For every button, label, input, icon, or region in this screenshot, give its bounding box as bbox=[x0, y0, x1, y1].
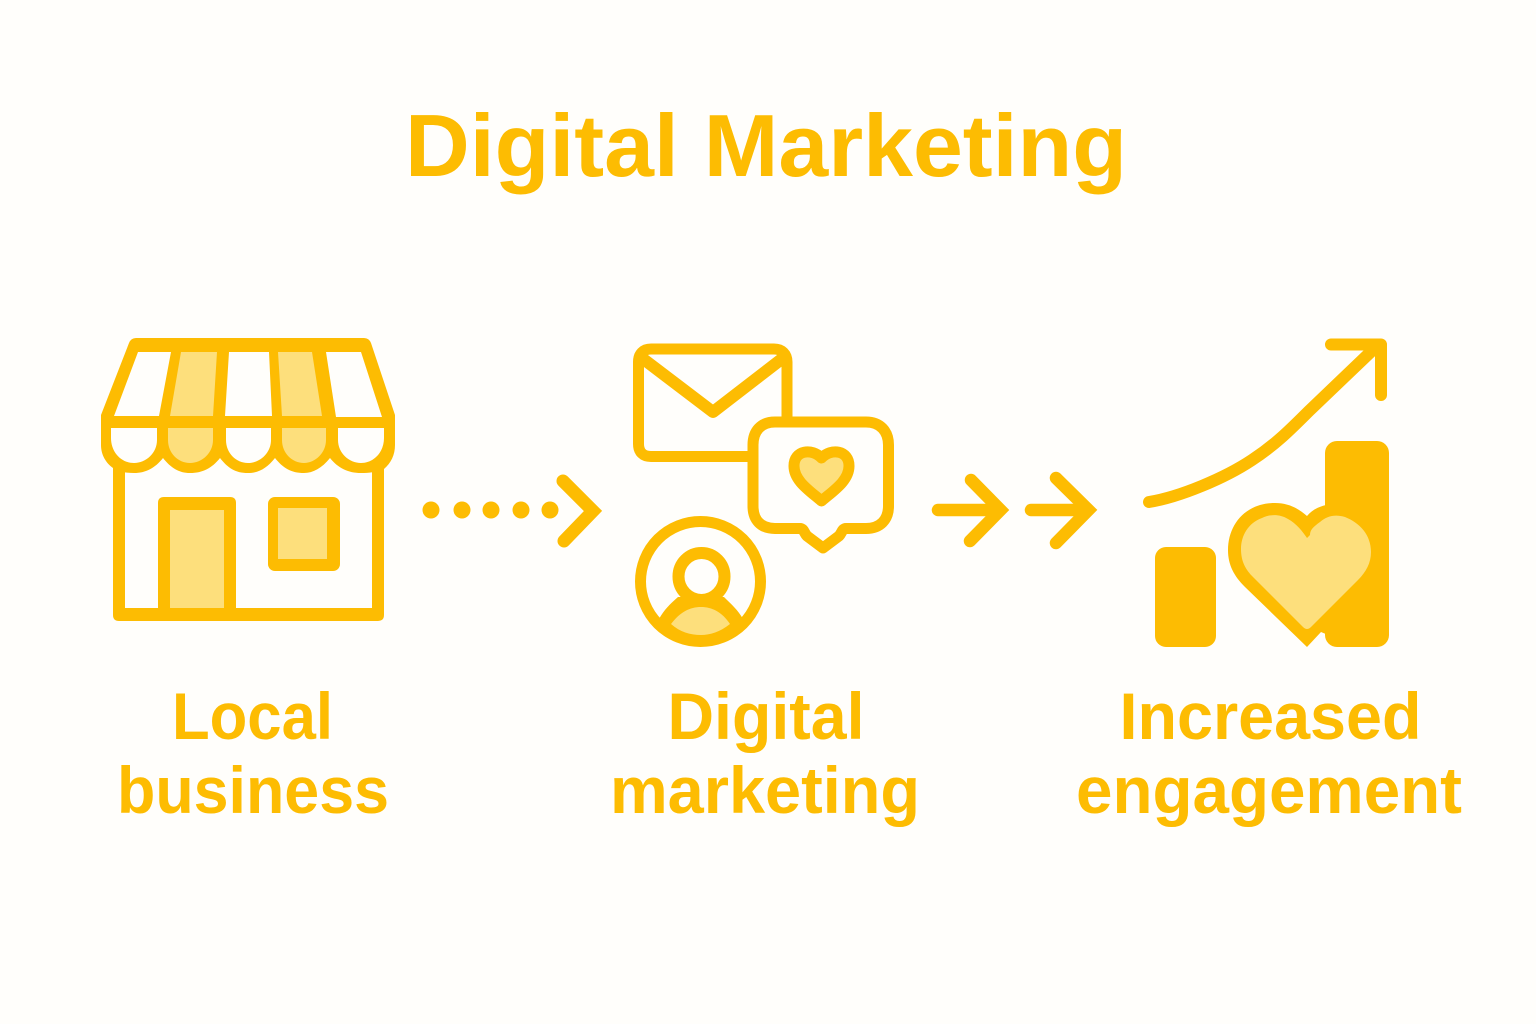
door bbox=[158, 497, 236, 615]
awning stripes bbox=[114, 352, 382, 417]
arrows: double bbox=[938, 478, 1088, 543]
speech bubble bbox=[753, 422, 888, 548]
short bar bbox=[1155, 547, 1216, 647]
icon: storefront bbox=[101, 338, 395, 621]
title: Digital Marketing bbox=[405, 96, 1127, 195]
label: digital marketing: marketing bbox=[610, 753, 920, 827]
heart in bubble bbox=[794, 452, 849, 501]
arrow: dotted bbox=[422, 481, 593, 541]
label: increased engagement bbox=[1076, 679, 1462, 827]
storefront walls bbox=[113, 460, 384, 621]
window bbox=[268, 497, 340, 571]
tall bar bbox=[1325, 441, 1389, 647]
growth arrow bbox=[1149, 345, 1378, 502]
label: increased engagement: engagement bbox=[1076, 753, 1462, 827]
label: digital marketing bbox=[610, 679, 920, 827]
user avatar bbox=[640, 522, 760, 642]
envelope bbox=[638, 349, 787, 456]
icon: growth chart with heart bbox=[1149, 344, 1389, 647]
awning silhouette bbox=[101, 338, 395, 473]
label: digital marketing: Digital bbox=[668, 679, 864, 753]
label: increased engagement: Increased bbox=[1120, 679, 1422, 753]
label: local business: business bbox=[117, 753, 389, 827]
awning scallops bbox=[111, 428, 384, 463]
heart bbox=[1228, 503, 1340, 647]
label: local business: Local bbox=[172, 679, 333, 753]
icon: email, message and user bbox=[638, 349, 888, 642]
label: local business bbox=[117, 679, 389, 827]
